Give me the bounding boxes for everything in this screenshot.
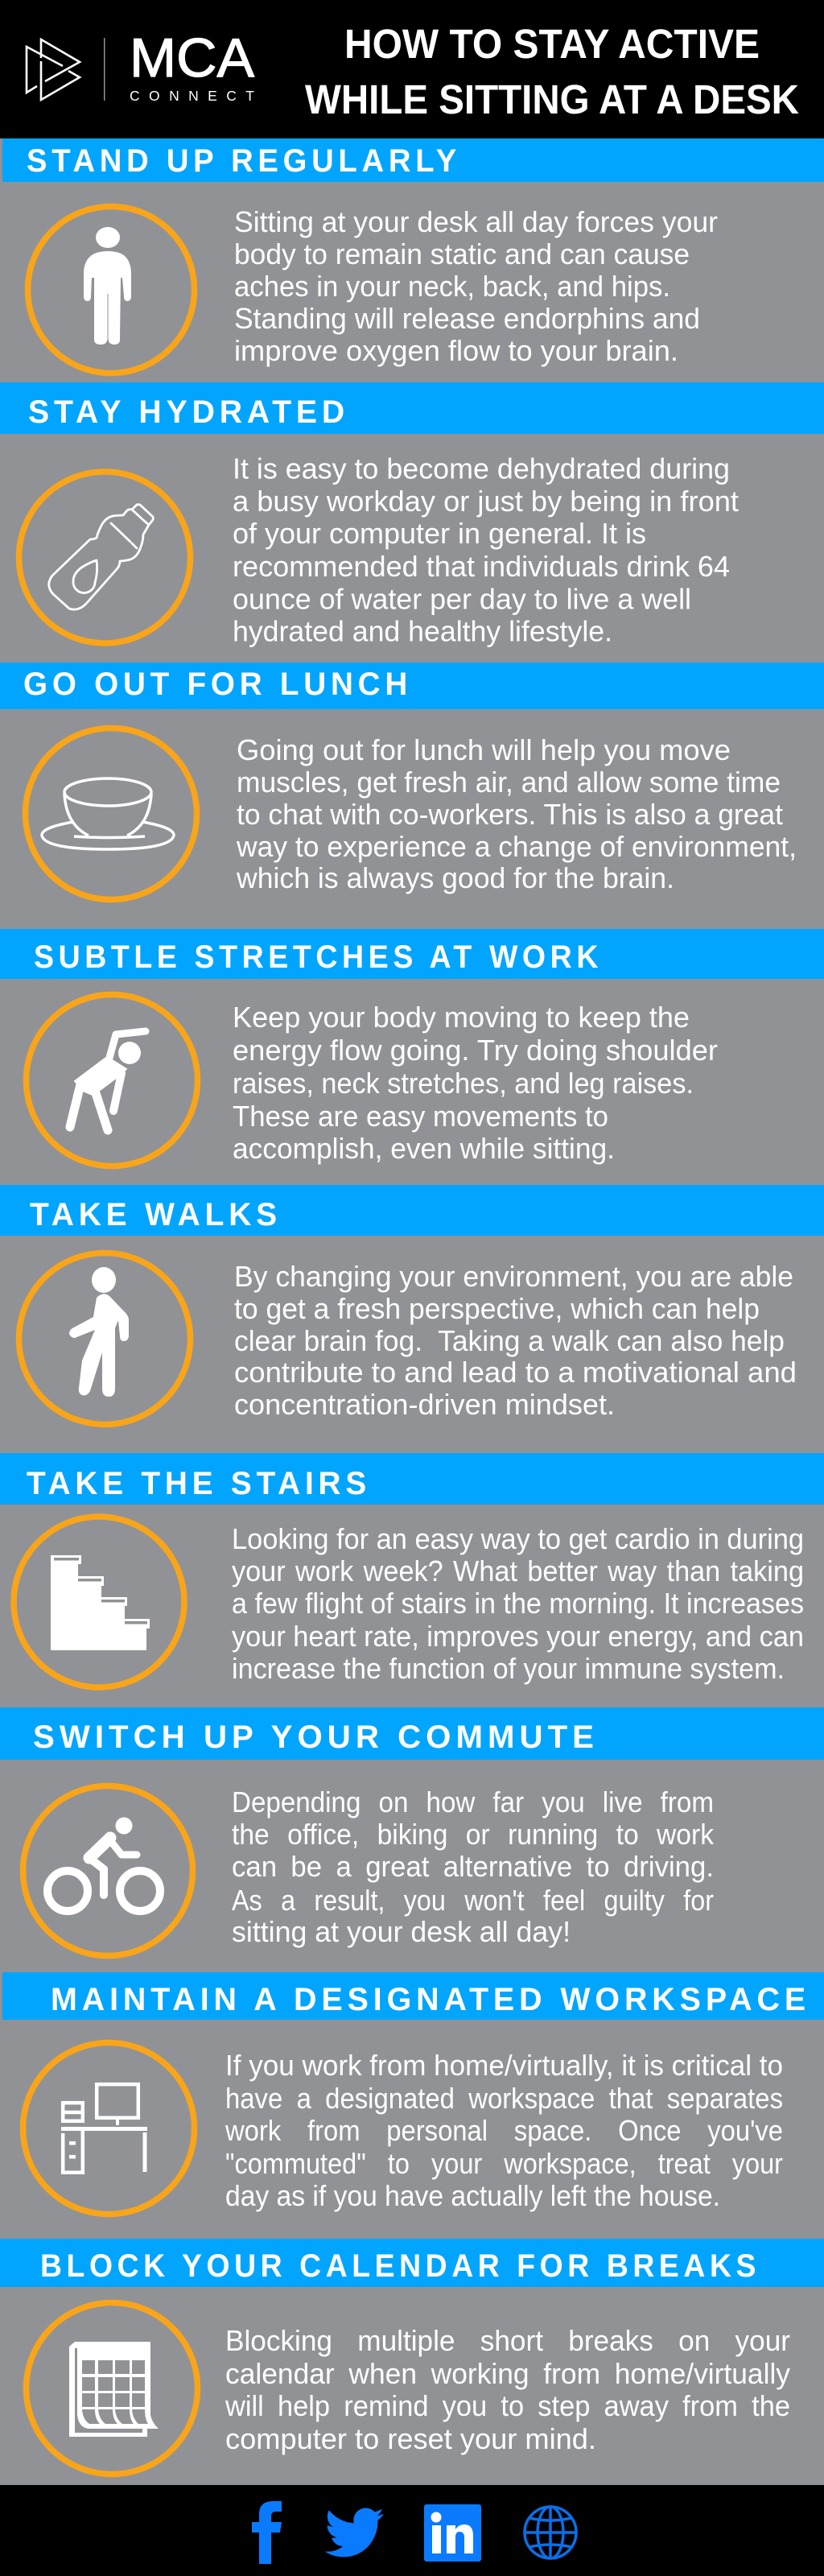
body text: raises, neck stretches, and leg raises. — [233, 1067, 694, 1100]
icon: water bottle — [19, 472, 190, 643]
heading: switch up your commute — [0, 1707, 824, 1760]
body text: Standing will release endorphins and — [234, 302, 700, 335]
body text: These are easy movements to — [233, 1100, 608, 1133]
body text — [232, 1522, 804, 1685]
icon: linkedin — [424, 2504, 481, 2562]
panel: stand up regularly — [2, 138, 824, 374]
heading: block your calendar for breaks: BLOCK YOUR CALENDAR FOR BREAKS — [40, 2248, 760, 2284]
body text: recommended that individuals drink 64 — [233, 550, 730, 583]
heading: stand up regularly: STAND UP REGULARLY — [27, 143, 461, 179]
icon: desk with computer — [23, 2043, 195, 2214]
body text: energy flow going. Try doing shoulder — [233, 1034, 718, 1067]
body text: contribute to and lead to a motivational and — [234, 1356, 797, 1389]
heading: go out for lunch — [0, 663, 824, 709]
footer — [0, 2485, 824, 2576]
icon: globe — [525, 2507, 576, 2558]
body text: a busy workday or just by being in front — [233, 485, 739, 518]
body text: Looking for an easy way to get cardio in during — [232, 1522, 804, 1555]
heading: stay hydrated: STAY HYDRATED — [28, 394, 349, 430]
heading: stay hydrated — [0, 382, 824, 434]
body text: improve oxygen flow to your brain. — [234, 334, 678, 367]
body text — [234, 205, 718, 367]
panel: take the stairs — [0, 1453, 824, 1687]
panel: block your calendar for breaks — [0, 2239, 824, 2475]
panel: stay hydrated — [0, 382, 824, 647]
body text: have a designated workspace that separates — [225, 2082, 783, 2115]
body text: will help remind you to step away from the — [225, 2389, 790, 2422]
body text: sitting at your desk all day! — [232, 1915, 571, 1948]
body text — [234, 1260, 797, 1421]
icon: cyclist — [23, 1785, 193, 1956]
header — [0, 0, 824, 138]
heading: take the stairs — [0, 1453, 824, 1505]
icon: stretching figure — [26, 995, 198, 1166]
body text: of your computer in general. It is — [233, 517, 646, 550]
heading: stand up regularly — [2, 138, 824, 182]
icon: stairs — [14, 1517, 184, 1687]
logo: MCA Connect — [27, 27, 255, 104]
body text: It is easy to become dehydrated during — [233, 452, 730, 485]
body text — [225, 2049, 783, 2212]
body text: Sitting at your desk all day forces your — [234, 205, 718, 238]
body text: As a result, you won't feel guilty for — [232, 1884, 714, 1917]
body text: to get a fresh perspective, which can help — [234, 1292, 760, 1325]
body text: your heart rate, improves your energy, and can — [232, 1620, 804, 1653]
body text: concentration-driven mindset. — [234, 1388, 615, 1421]
icon: facebook — [252, 2501, 282, 2564]
heading: subtle stretches at work: SUBTLE STRETCHES AT WORK — [34, 939, 603, 975]
body text: which is always good for the brain. — [236, 861, 674, 894]
body text: aches in your neck, back, and hips. — [234, 270, 670, 303]
heading: switch up your commute: SWITCH UP YOUR COMMUTE — [33, 1719, 599, 1755]
body text: to chat with co-workers. This is also a great — [237, 798, 783, 831]
body text: Depending on how far you live from — [232, 1785, 714, 1818]
title: HOW TO STAY ACTIVE — [344, 21, 760, 67]
body text: calendar when working from home/virtually — [225, 2357, 790, 2390]
body text: your work week? What better way than taking — [232, 1554, 804, 1587]
panel: switch up your commute — [0, 1707, 824, 1956]
heading: subtle stretches at work — [0, 929, 824, 979]
body text: accomplish, even while sitting. — [233, 1132, 615, 1165]
icon: walking figure — [19, 1253, 190, 1425]
logo: MCA Connect: MCA — [130, 27, 255, 89]
icon: twitter — [325, 2508, 384, 2557]
body text: a few flight of stairs in the morning. It increases — [232, 1587, 804, 1620]
body text: Going out for lunch will help you move — [237, 733, 731, 766]
body text: the office, biking or running to work — [232, 1818, 715, 1851]
body text: body to remain static and can cause — [234, 237, 690, 270]
body text — [233, 1001, 718, 1165]
body text: Blocking multiple short breaks on your — [225, 2324, 790, 2357]
heading: go out for lunch: GO OUT FOR LUNCH — [23, 667, 412, 702]
panel: subtle stretches at work — [0, 929, 824, 1166]
body text — [233, 452, 739, 647]
body text: way to experience a change of environment, — [236, 830, 797, 863]
body text: muscles, get fresh air, and allow some time — [237, 766, 781, 799]
body text: By changing your environment, you are able — [234, 1260, 793, 1293]
body text: can be a great alternative to driving. — [232, 1850, 714, 1883]
heading: take walks: TAKE WALKS — [30, 1197, 282, 1232]
body text: If you work from home/virtually, it is critical to — [225, 2049, 783, 2082]
body text: ounce of water per day to live a well — [233, 583, 691, 615]
panel: go out for lunch — [0, 663, 824, 900]
icon: standing person — [27, 206, 195, 374]
body text: hydrated and healthy lifestyle. — [233, 615, 612, 647]
body text: day as if you have actually left the house. — [225, 2179, 720, 2212]
heading: maintain a designated workspace: MAINTAIN A DESIGNATED WORKSPACE — [51, 1982, 810, 2017]
body text: work from personal space. Once you've — [225, 2114, 783, 2147]
body text: increase the function of your immune system. — [232, 1652, 785, 1685]
heading: take the stairs: TAKE THE STAIRS — [27, 1466, 371, 1501]
heading: take walks — [0, 1185, 824, 1236]
body text: computer to reset your mind. — [225, 2422, 596, 2455]
body text — [236, 733, 797, 894]
title: WHILE SITTING AT A DESK — [305, 76, 799, 122]
body text: clear brain fog. Taking a walk can also help — [234, 1324, 785, 1357]
body text — [225, 2324, 790, 2455]
panel: maintain a designated workspace — [2, 1972, 824, 2214]
icon: calendar — [26, 2302, 198, 2475]
body text: Keep your body moving to keep the — [233, 1001, 690, 1034]
heading: block your calendar for breaks — [0, 2239, 824, 2287]
body text — [232, 1785, 715, 1948]
title — [305, 21, 799, 122]
logo: MCA Connect: CONNECT — [130, 88, 254, 104]
panel: take walks — [0, 1185, 824, 1425]
icon: bowl and plate — [26, 728, 196, 900]
